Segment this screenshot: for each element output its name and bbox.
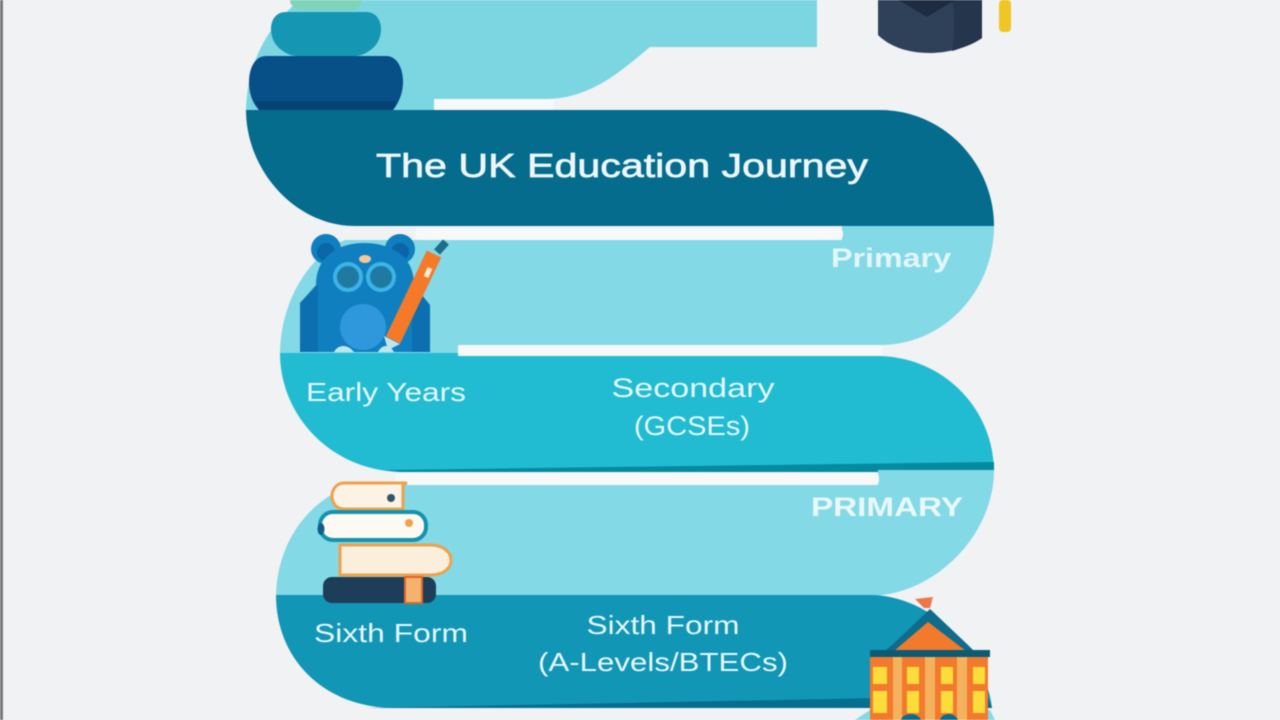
panel: primary band <box>280 226 994 356</box>
panel: top light band <box>246 0 817 110</box>
label: primary: Primary <box>831 243 951 273</box>
label: A-Levels BTECs: (A-Levels/BTECs) <box>538 647 788 677</box>
label: sixth form centre: Sixth Form <box>586 610 740 640</box>
label: GCSEs: (GCSEs) <box>634 411 750 441</box>
icon: school building <box>855 597 995 720</box>
panel: sixth form band <box>276 595 992 708</box>
icon: stack of books <box>318 483 451 603</box>
icon: stacked stones <box>249 0 403 110</box>
label: secondary: Secondary <box>612 373 775 403</box>
panel: title band <box>246 110 994 226</box>
icon: graduation cap <box>878 0 1011 53</box>
label: early years: Early Years <box>306 377 466 407</box>
panel: lower primary band <box>276 470 994 596</box>
label: sixth form left: Sixth Form <box>314 618 468 648</box>
panel: secondary band <box>280 353 994 472</box>
title: The UK Education Journey <box>376 147 869 184</box>
label: PRIMARY: PRIMARY <box>811 492 963 522</box>
icon: owl with pencil <box>300 234 446 352</box>
